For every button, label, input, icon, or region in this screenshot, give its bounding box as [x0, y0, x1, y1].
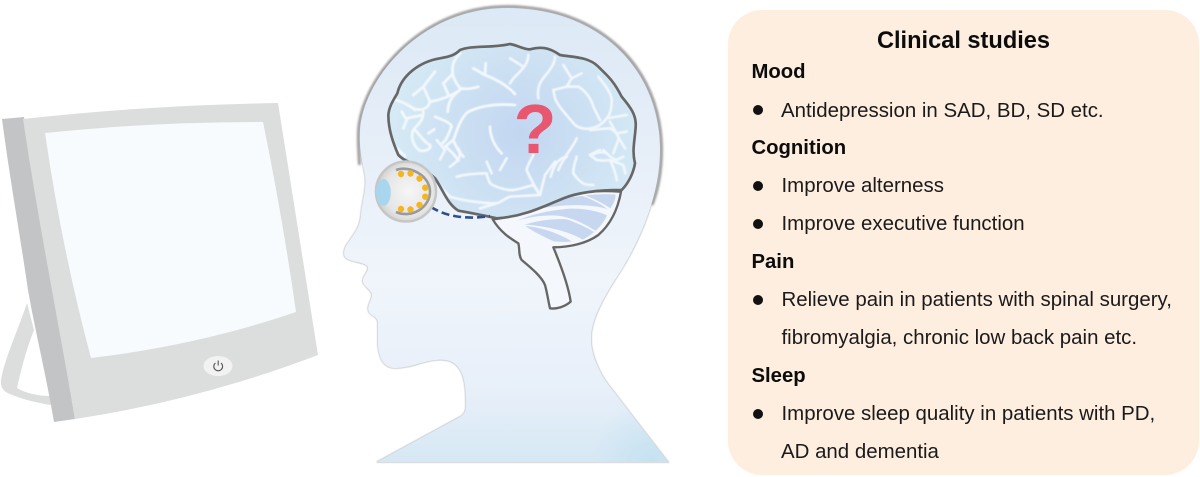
section: cognition: Improve executive function: [782, 212, 1025, 235]
panel title: Clinical studies: [877, 28, 1050, 54]
section: mood: Antidepression in SAD, BD, SD etc.: [781, 99, 1104, 122]
section: sleep: [752, 365, 1155, 463]
section: cognition: [752, 137, 1025, 235]
power button: [204, 356, 232, 376]
section: sleep: AD and dementia: [781, 440, 940, 463]
section: mood: Mood: [752, 61, 806, 83]
section: cognition: Cognition: [752, 137, 846, 159]
head silhouette: [344, 6, 668, 464]
section: pain: fibromyalgia, chronic low back pain etc.: [782, 326, 1137, 349]
retinal cells: [398, 170, 428, 213]
section: pain: Relieve pain in patients with spinal surgery,: [782, 288, 1172, 311]
section: pain: [752, 251, 1172, 349]
cerebellum folia: [518, 194, 615, 242]
brain gyri, left: [393, 53, 515, 161]
section: sleep: Sleep: [752, 365, 806, 387]
brain gyri, lower: [433, 140, 625, 208]
device frame: [23, 103, 318, 419]
device stand: [1, 303, 51, 405]
section: pain: Pain: [752, 251, 794, 273]
device screen: [45, 122, 296, 358]
section: mood: [752, 61, 1104, 122]
light therapy device: [1, 103, 318, 422]
retina arc: [396, 169, 430, 214]
optic nerve dashed line: [431, 207, 490, 218]
panel: clinical studies: [728, 10, 1199, 475]
cerebellum and brainstem: [493, 191, 621, 309]
cornea: [376, 179, 391, 206]
question mark: ?: [514, 90, 556, 168]
section: cognition: Improve alterness: [782, 174, 944, 197]
brain gyri, right: [510, 55, 627, 170]
section: sleep: Improve sleep quality in patients with PD,: [782, 402, 1155, 425]
device side: [2, 117, 75, 422]
brain: [388, 44, 636, 218]
eye: [376, 162, 436, 222]
